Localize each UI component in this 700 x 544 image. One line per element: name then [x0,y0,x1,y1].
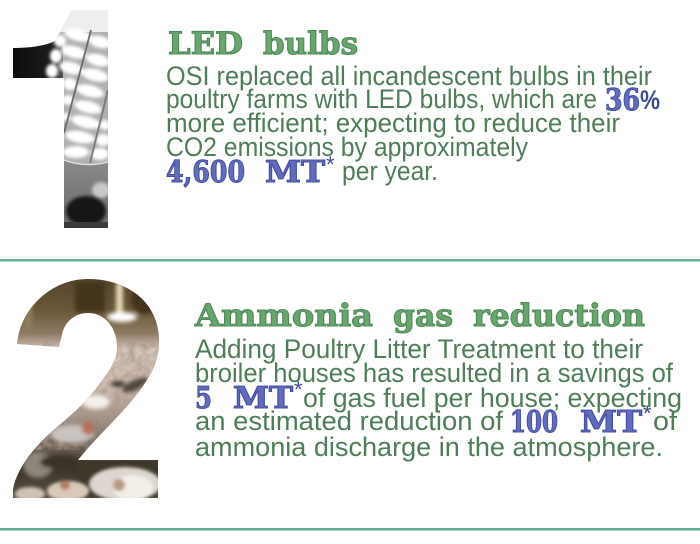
text block: Ammonia reduction description: MT [580,405,643,440]
text block: Ammonia reduction description: of gas fuel per house; expecting [303,383,682,413]
heading: LED bulbs [168,26,358,62]
text block: LED bulbs description: poultry farms with LED bulbs, which are [166,84,597,114]
text block: LED bulbs description: 36 [605,83,640,118]
text block: Ammonia reduction description: * [643,401,652,426]
text block: Ammonia reduction description: Adding Poultry Litter Treatment to their [195,334,643,364]
text block: Ammonia reduction description: 100 [510,405,558,440]
text block: LED bulbs description: % [640,85,660,115]
text block: LED bulbs description: per year. [342,156,438,186]
text block: LED bulbs description [166,61,660,190]
text block: Ammonia reduction description: MT [233,381,294,416]
text block: LED bulbs description: more efficient; expecting to reduce their [166,108,620,138]
text block: LED bulbs description: MT [265,155,326,190]
numeral 1 with LED bulb photo [13,10,112,228]
heading: Ammonia gas reduction: reduction [473,298,645,334]
text block: LED bulbs description: CO2 emissions by approximately [166,132,528,162]
heading: Ammonia gas reduction [194,298,645,334]
heading: Ammonia gas reduction: Ammonia [194,298,373,334]
text block: Ammonia reduction description: * [294,377,303,402]
text block: LED bulbs description: OSI replaced all incandescent bulbs in their [166,61,652,91]
text block: Ammonia reduction description: of [653,406,678,436]
panel: LED bulbs [13,10,660,228]
text block: LED bulbs description: 4,600 [166,155,245,190]
divider line 2 [0,528,700,530]
text block: LED bulbs description: * [326,152,335,177]
panel: Ammonia gas reduction [10,278,682,501]
divider line 1 [0,259,700,262]
text block: Ammonia reduction description: broiler houses has resulted in a savings of [195,358,673,388]
text block: Ammonia reduction description: an estimated reduction of [195,406,504,436]
heading: Ammonia gas reduction: gas [393,298,453,334]
heading: LED bulbs: bulbs [263,26,358,62]
numeral 2 with chicken photo [10,278,162,501]
text block: Ammonia reduction description [195,334,682,462]
text block: Ammonia reduction description: ammonia discharge in the atmosphere. [195,432,663,462]
text block: Ammonia reduction description: 5 [195,381,212,416]
heading: LED bulbs: LED [168,26,243,62]
